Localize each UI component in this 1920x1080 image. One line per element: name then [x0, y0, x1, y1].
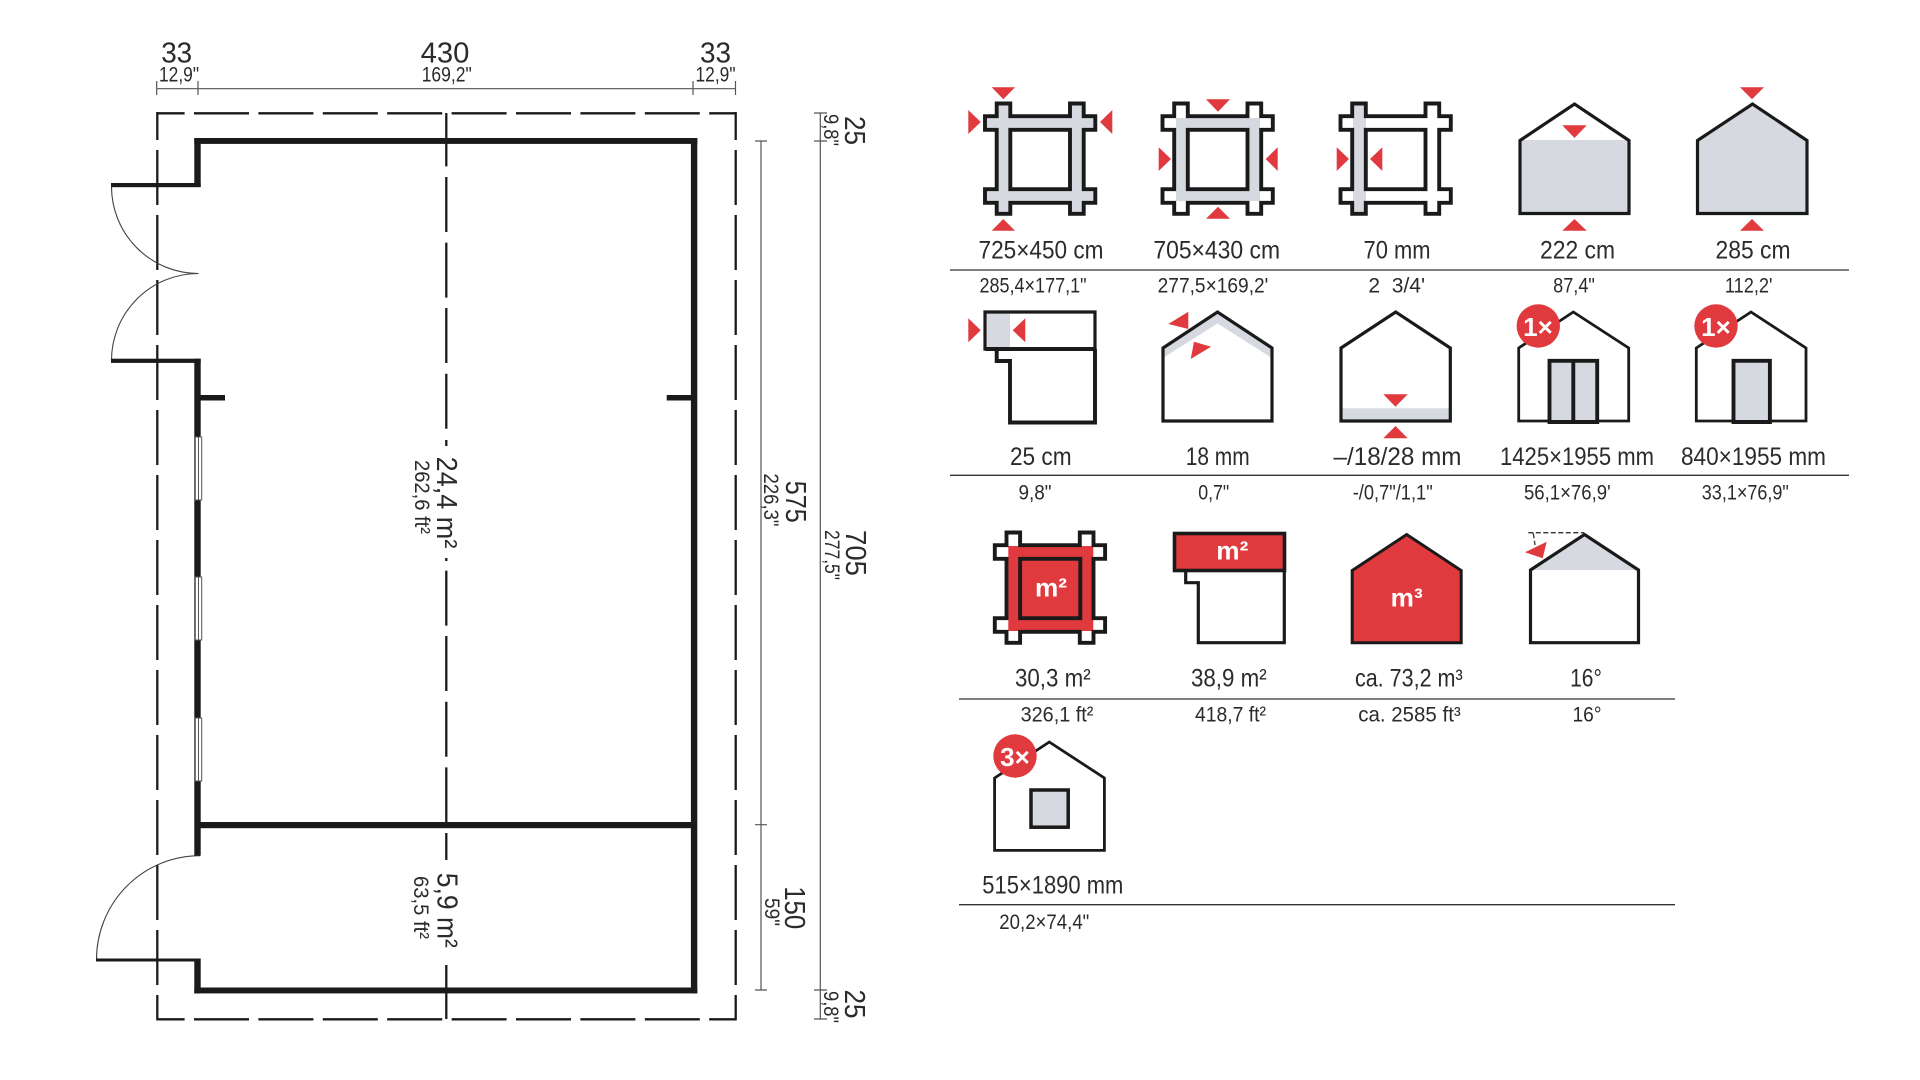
- spec: 30,3 m2: [1015, 665, 1093, 727]
- inner vertical dimension line: 575: [779, 481, 811, 523]
- inner vertical dimension line: [755, 141, 811, 990]
- icon: double door: [1517, 304, 1629, 422]
- spec: ca. 73,2 m3: ca. 73,2 m³: [1355, 665, 1463, 693]
- spec: 515x1890 mm: [982, 871, 1123, 934]
- spec: 38,9 m2: [1191, 665, 1267, 727]
- spec: ca. 73,2 m3: [1355, 665, 1463, 727]
- area label: storage room: 5,9 m²: [430, 873, 462, 948]
- area label: main room: 262,6 ft²: [410, 460, 433, 534]
- icon: roof area: [1174, 534, 1284, 643]
- icon: windows: [993, 734, 1104, 850]
- outer vertical dimension line: 9,8": [819, 114, 842, 146]
- badge: 1x: 1×: [1701, 312, 1731, 342]
- windows: [195, 437, 202, 781]
- inner vertical dimension line: 150: [778, 886, 810, 929]
- outer vertical dimension line: 277,5": [820, 530, 843, 580]
- top dimension line: 430: [421, 38, 469, 70]
- spec: floor thickness values: -/0,7"/1,1": [1353, 481, 1433, 504]
- icon: roof pitch: [1525, 533, 1638, 643]
- spec: 30,3 m2: 326,1 ft²: [1021, 704, 1093, 727]
- top dimension line: 33: [700, 38, 731, 70]
- spec: 38,9 m2: 418,7 ft²: [1195, 704, 1266, 727]
- icon: roof thickness: [1163, 312, 1272, 421]
- spec: 16 degrees: 16°: [1570, 665, 1602, 693]
- spec: 285 cm: [1716, 236, 1790, 297]
- icon: wall height: [1520, 104, 1629, 231]
- spec: 70 mm: 2 3/4': [1368, 274, 1425, 297]
- icon: total height: [1698, 87, 1807, 231]
- icon: volume: [1352, 534, 1461, 643]
- plot boundary dashed outline: [157, 112, 736, 1020]
- area label: main room: [410, 457, 462, 549]
- top dimension line: 12,9": [159, 64, 199, 87]
- spec: 1425x1955 mm: [1500, 443, 1654, 504]
- spec: 16 degrees: 16°: [1572, 704, 1602, 727]
- top dimension line: 33: [161, 38, 192, 70]
- spec: 25 cm: 9,8": [1018, 481, 1052, 504]
- spec: 25 cm: 25 cm: [1010, 443, 1072, 471]
- spec: floor thickness values: –/18/28 mm: [1334, 443, 1462, 471]
- top dimension line: 12,9": [696, 64, 736, 87]
- icon: outer footprint 725x450: [968, 87, 1112, 231]
- icon: wall footprint 705x430: [1159, 99, 1278, 219]
- icon: roof overhang: [968, 312, 1095, 422]
- spec: 30,3 m2: 30,3 m²: [1015, 665, 1091, 693]
- door swing arcs: [96, 187, 200, 960]
- spec: 705x430 cm: 705×430 cm: [1153, 236, 1280, 264]
- spec: 70 mm: 70 mm: [1364, 236, 1430, 264]
- spec: 222 cm: [1540, 236, 1615, 297]
- icon: floor area with walls: [995, 532, 1105, 643]
- spec: 222 cm: 87,4": [1553, 274, 1595, 297]
- badge: 3x: 3×: [1000, 742, 1030, 772]
- top dimension line: 169,2": [422, 64, 472, 87]
- icon: wall thickness: [1337, 104, 1451, 214]
- area label: storage room: [409, 873, 462, 948]
- icon: floor thickness: [1341, 312, 1450, 438]
- outer vertical dimension line: 25: [838, 116, 870, 145]
- spec: 18 mm: 18 mm: [1186, 443, 1250, 471]
- top dimension line: [157, 38, 735, 95]
- spec: 18 mm: 0,7": [1198, 481, 1229, 504]
- panel: floor plan: [96, 38, 871, 1023]
- building walls: [96, 138, 697, 994]
- inner vertical dimension line: 226,3": [759, 474, 782, 526]
- panel: specification icons: [950, 87, 1849, 934]
- spec: 70 mm: [1364, 236, 1430, 297]
- spec: 515x1890 mm: 515×1890 mm: [982, 871, 1123, 899]
- outer vertical dimension line: 25: [838, 990, 870, 1018]
- center axis dashed line: [445, 113, 447, 1019]
- outer vertical dimension line: [814, 113, 871, 1023]
- spec: 515x1890 mm: 20,2×74,4": [999, 911, 1089, 934]
- inner vertical dimension line: 59": [760, 898, 783, 926]
- icon: single door: [1694, 304, 1806, 422]
- spec: 705x430 cm: 277,5×169,2': [1158, 274, 1268, 297]
- outer vertical dimension line: 9,8": [819, 991, 842, 1023]
- spec: 25 cm: [1010, 443, 1072, 504]
- icon: floor area with walls: m²: [1035, 573, 1067, 603]
- icon: volume: m³: [1391, 583, 1423, 613]
- outer vertical dimension line: 705: [839, 530, 871, 576]
- spec: 725x450 cm: [978, 236, 1104, 297]
- spec: 38,9 m2: 38,9 m²: [1191, 665, 1267, 693]
- spec: 1425x1955 mm: 56,1×76,9': [1524, 481, 1611, 504]
- badge: 1x: 1×: [1523, 312, 1553, 342]
- spec: 705x430 cm: [1153, 236, 1280, 297]
- row dividers: [950, 270, 1849, 905]
- spec: 285 cm: 285 cm: [1716, 236, 1790, 264]
- spec: floor thickness values: [1334, 443, 1462, 504]
- spec: 725x450 cm: 285,4×177,1": [980, 274, 1086, 297]
- area label: main room: 24,4 m²: [430, 457, 462, 549]
- spec: 840x1955 mm: 840×1955 mm: [1681, 443, 1826, 471]
- area label: storage room: 63,5 ft²: [409, 876, 432, 939]
- spec: 840x1955 mm: [1681, 443, 1826, 504]
- spec: 725x450 cm: 725×450 cm: [978, 236, 1104, 264]
- spec: 18 mm: [1186, 443, 1250, 504]
- spec: 1425x1955 mm: 1425×1955 mm: [1500, 443, 1654, 471]
- spec: 285 cm: 112,2': [1725, 274, 1773, 297]
- icon: roof area: m²: [1216, 535, 1249, 565]
- spec: 840x1955 mm: 33,1×76,9": [1702, 481, 1789, 504]
- spec: 16 degrees: [1570, 665, 1602, 727]
- spec: 222 cm: 222 cm: [1540, 236, 1615, 264]
- spec: ca. 73,2 m3: ca. 2585 ft³: [1358, 704, 1461, 727]
